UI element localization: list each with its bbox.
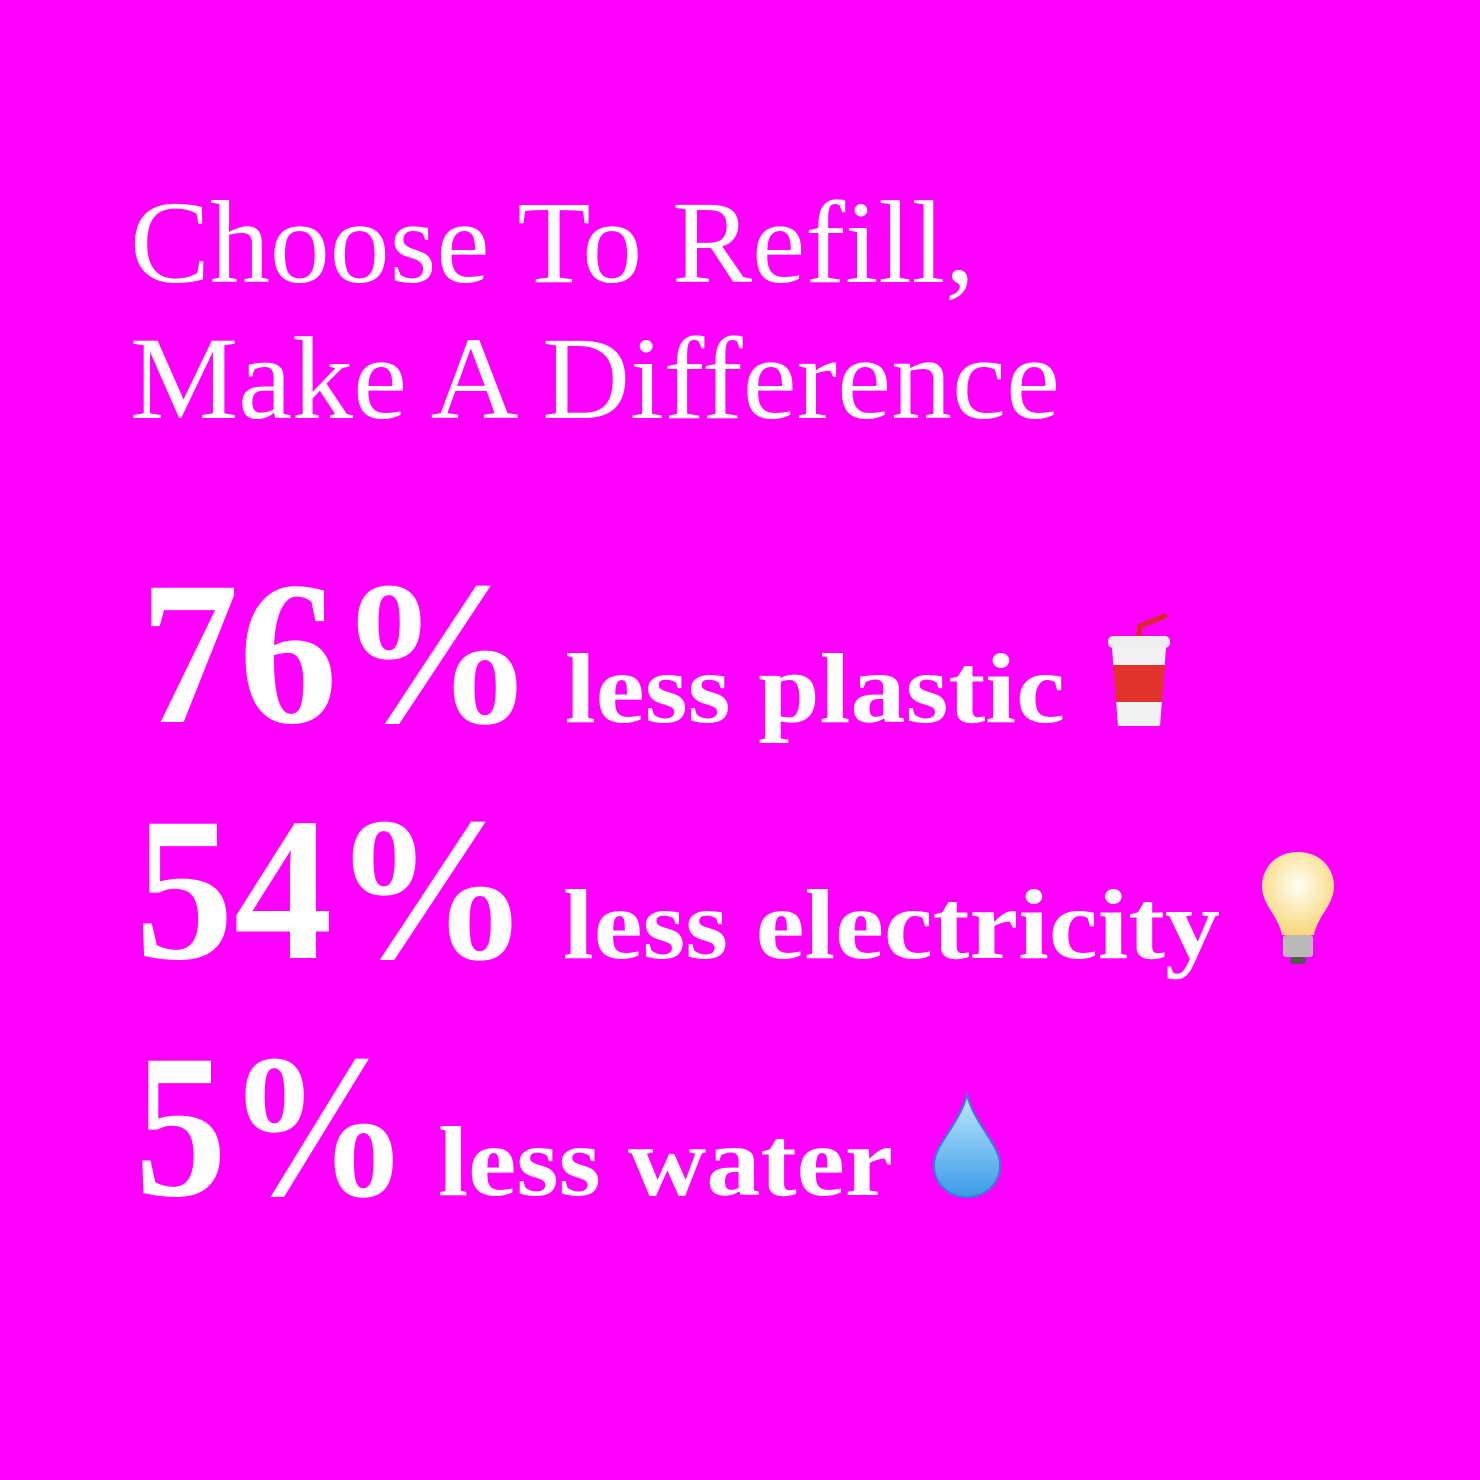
stat: water: 5% xyxy=(135,1013,410,1240)
icon: cup xyxy=(1108,616,1170,726)
stat: electricity: less electricity xyxy=(563,869,1220,980)
icon: light bulb xyxy=(1262,852,1334,964)
title xyxy=(130,177,1060,444)
title: Make A Difference xyxy=(130,313,1060,444)
stat: electricity xyxy=(135,776,1334,1003)
title: Choose To Refill, xyxy=(130,177,975,308)
stat: plastic: less plastic xyxy=(565,633,1065,744)
stat: plastic xyxy=(140,540,1170,767)
stat: electricity: 54% xyxy=(135,776,530,1003)
icon: water drop xyxy=(934,1095,1000,1197)
stat: water xyxy=(135,1013,1000,1240)
stat: water: less water xyxy=(438,1106,893,1217)
stat: plastic: 76% xyxy=(140,540,535,767)
